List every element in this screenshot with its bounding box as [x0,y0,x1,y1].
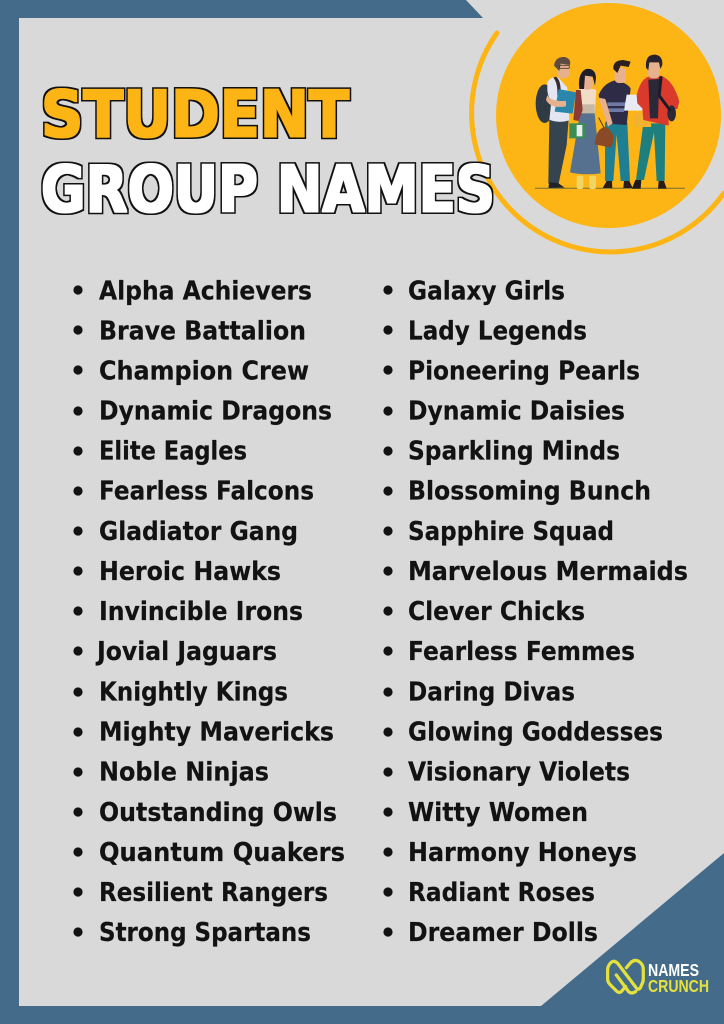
list items: right column: Lady Legends [408,316,587,346]
list items: right column [408,276,688,948]
list items: left column: Outstanding Owls [99,798,337,828]
list items: right column: Harmony Honeys [408,838,637,868]
list items: left column: Invincible Irons [99,597,303,627]
title [41,78,495,228]
icon: N mark [608,960,643,993]
list items: right column: Radiant Roses [408,878,595,908]
list items: right column: Blossoming Bunch [408,476,651,506]
list items: left column [95,276,345,948]
bullets: left column [73,285,83,937]
student 4 in red jacket [632,55,679,189]
list items: right column: Dynamic Daisies [408,396,625,426]
list items: right column: Sparkling Minds [408,436,620,466]
list items: right column: Clever Chicks [408,597,585,627]
list items: left column: Knightly Kings [99,678,288,708]
bullets: right column [383,285,393,937]
student 3 with laptop and brown bag [595,60,647,188]
list items: left column: Jovial Jaguars [95,637,277,667]
list items: right column: Visionary Violets [408,758,630,788]
list items: left column: Champion Crew [99,356,309,386]
list items: left column: Alpha Achievers [99,276,312,306]
list items: left column: Elite Eagles [99,436,247,466]
list items: left column: Resilient Rangers [99,878,328,908]
list items: left column: Strong Spartans [99,918,311,948]
ground line [535,188,685,189]
logo: Names Crunch [608,960,709,996]
list items: left column: Fearless Falcons [99,476,314,506]
logo text: NAMES: NAMES [648,960,699,980]
list items: right column: Daring Divas [408,678,575,708]
list items: right column: Galaxy Girls [408,276,565,306]
title line: STUDENT: STUDENT [41,78,349,152]
decorative ring arc [472,33,724,252]
list items: right column: Marvelous Mermaids [408,557,688,587]
name list: right column [383,276,688,948]
list items: right column: Sapphire Squad [408,517,614,547]
logo text: CRUNCH: CRUNCH [648,976,709,996]
list items: left column: Noble Ninjas [99,758,269,788]
name list: left column [73,276,345,948]
list items: right column: Dreamer Dolls [408,918,598,948]
list items: left column: Brave Battalion [99,316,306,346]
list items: left column: Quantum Quakers [99,838,345,868]
list items: left column: Dynamic Dragons [99,396,332,426]
student 2 with skirt and green book [569,69,601,189]
list items: right column: Pioneering Pearls [408,356,640,386]
student 1 with backpack [536,57,576,188]
list items: left column: Mighty Mavericks [99,718,334,748]
illustration: four students [535,55,685,189]
list items: left column: Heroic Hawks [99,557,281,587]
list items: right column: Fearless Femmes [408,637,635,667]
list items: right column: Witty Women [408,798,588,828]
list items: right column: Glowing Goddesses [408,718,663,748]
list items: left column: Gladiator Gang [99,517,298,547]
yellow circle [496,3,721,228]
title line: GROUP NAMES: GROUP NAMES [41,154,495,228]
